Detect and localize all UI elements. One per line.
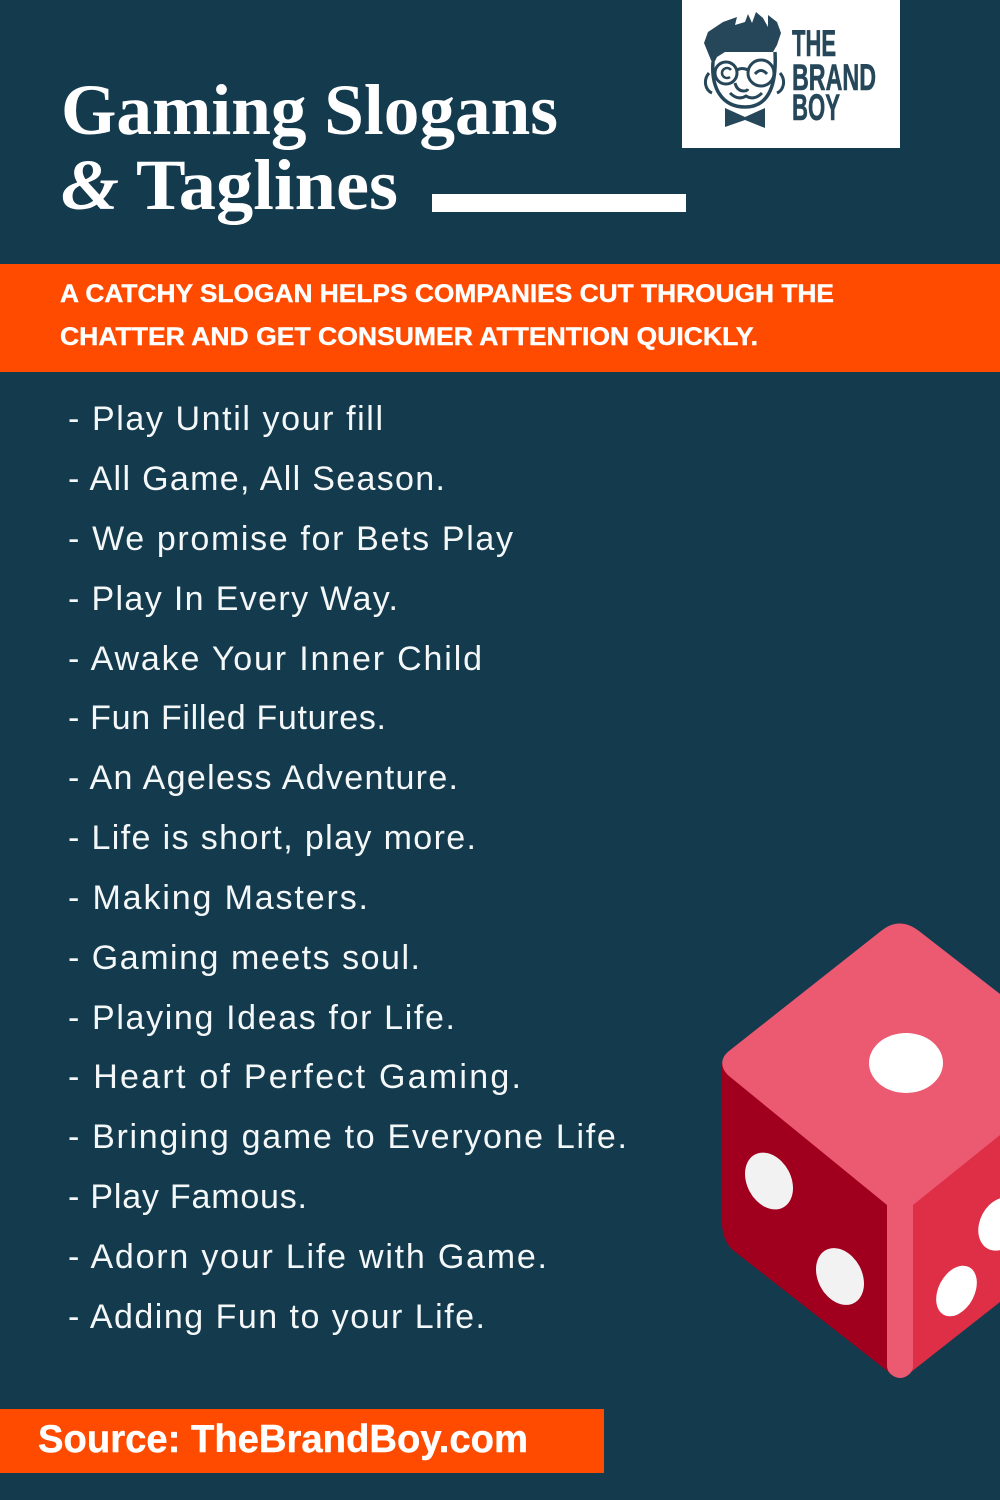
slogan list: - Adorn your Life with Game. xyxy=(68,1238,547,1276)
logo wordmark: THE xyxy=(792,23,836,64)
slogan list: - All Game, All Season. xyxy=(68,460,445,498)
slogan list xyxy=(68,400,627,1336)
slogan list: - Play Famous. xyxy=(68,1178,307,1216)
title: Gaming Slogans xyxy=(61,70,558,150)
slogan list: - Life is short, play more. xyxy=(68,819,476,857)
slogan list: - Awake Your Inner Child xyxy=(68,640,482,678)
logo wordmark: BOY xyxy=(792,87,840,128)
title: & xyxy=(61,145,119,225)
pip: left face lower xyxy=(806,1240,874,1313)
slogan list: - We promise for Bets Play xyxy=(68,520,513,558)
slogan list: - Heart of Perfect Gaming. xyxy=(68,1058,521,1096)
source bar xyxy=(0,1409,604,1473)
pip: right face lower xyxy=(928,1259,985,1323)
dice front edge xyxy=(887,1200,913,1378)
slogan list: - Making Masters. xyxy=(68,879,368,917)
slogan list: - Play Until your fill xyxy=(68,400,383,438)
dice top face xyxy=(722,924,1000,1205)
slogan list: - Gaming meets soul. xyxy=(68,939,420,977)
title xyxy=(61,70,558,225)
orange banner xyxy=(0,264,1000,372)
logo: The Brand Boy xyxy=(682,0,900,148)
slogan list: - Play In Every Way. xyxy=(68,580,398,618)
pip: top face xyxy=(869,1033,943,1093)
icon: boy mascot xyxy=(704,12,784,128)
banner text: A CATCHY SLOGAN HELPS COMPANIES CUT THROUGH THE xyxy=(60,280,834,308)
logo wordmark xyxy=(792,23,876,128)
slogan list: - Bringing game to Everyone Life. xyxy=(68,1118,627,1156)
banner text xyxy=(60,280,834,351)
slogan list: - Playing Ideas for Life. xyxy=(68,999,455,1037)
title: Taglines xyxy=(136,145,398,225)
icon: red dice xyxy=(722,924,1000,1378)
slogan list: - Fun Filled Futures. xyxy=(68,699,386,737)
pip: left face upper xyxy=(735,1144,803,1218)
dice left face xyxy=(722,1064,905,1373)
slogan list: - An Ageless Adventure. xyxy=(68,759,458,797)
title underline bar xyxy=(432,194,686,212)
dice right face xyxy=(890,1130,1000,1373)
logo wordmark: BRAND xyxy=(792,57,876,98)
source text: Source: TheBrandBoy.com xyxy=(38,1418,528,1461)
pip: right face upper xyxy=(969,1189,1000,1259)
banner text: CHATTER AND GET CONSUMER ATTENTION QUICKLY. xyxy=(60,323,758,351)
slogan list: - Adding Fun to your Life. xyxy=(68,1298,485,1336)
